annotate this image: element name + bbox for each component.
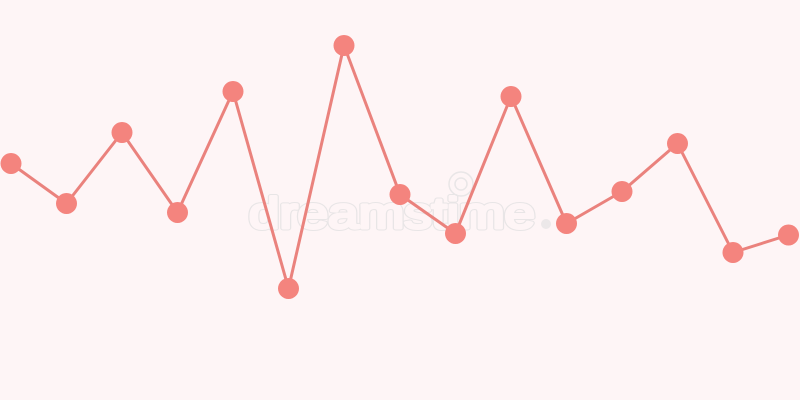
data line — [11, 46, 788, 288]
watermark: dreamstime — [249, 189, 535, 238]
watermark: dreamstime — [249, 189, 535, 238]
watermark — [249, 172, 551, 238]
data points — [0, 35, 799, 299]
